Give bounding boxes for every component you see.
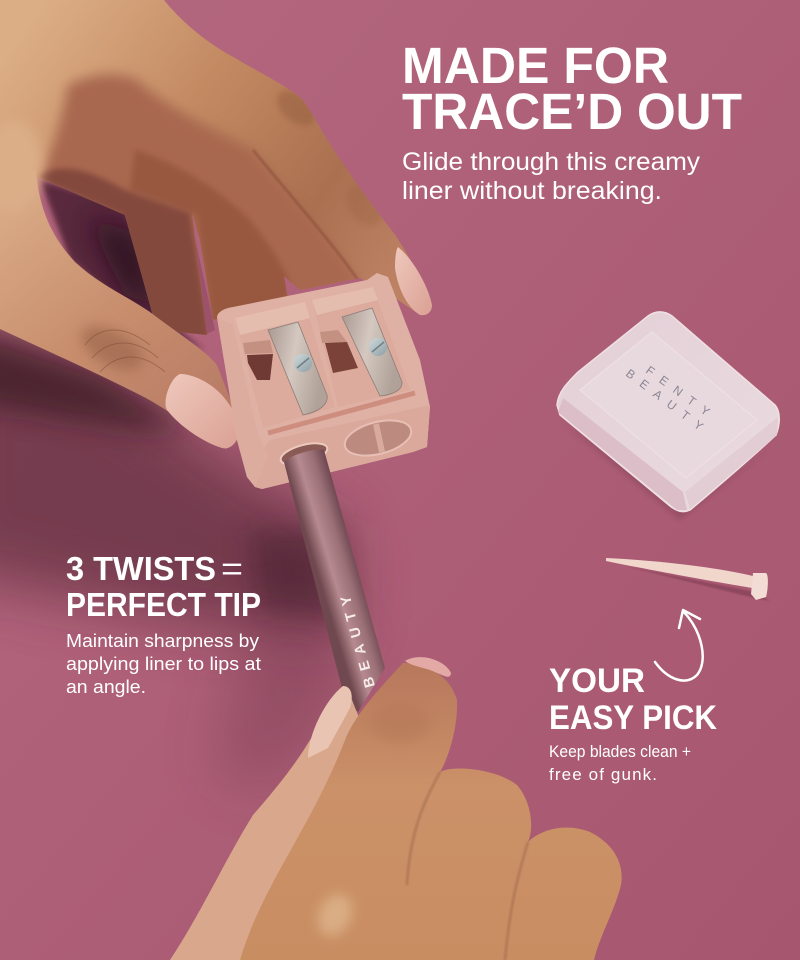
case logo: FENTY bbox=[643, 363, 720, 424]
case logo: BEAUTY bbox=[623, 366, 713, 439]
shaving hole bbox=[341, 414, 415, 462]
heading: made for trace'd out bbox=[402, 37, 742, 140]
heading: your easy pick: EASY PICK bbox=[549, 699, 717, 737]
clear case bbox=[557, 312, 779, 520]
heading: 3 twists: = bbox=[221, 550, 243, 587]
heading: your easy pick bbox=[549, 662, 717, 737]
folded fingers shading bbox=[35, 75, 391, 340]
left blade bbox=[268, 322, 327, 415]
sharpener body bbox=[217, 273, 430, 489]
groove bbox=[268, 393, 415, 433]
knuckle highlight bbox=[311, 888, 359, 942]
text: maintain sharpness: applying liner to lips at bbox=[66, 654, 261, 674]
cast shadows on background bbox=[0, 180, 345, 790]
text: maintain sharpness bbox=[66, 631, 261, 697]
text: maintain sharpness: an angle. bbox=[66, 677, 146, 697]
heading: made for trace'd out: TRACE’D OUT bbox=[402, 83, 742, 140]
subheading text bbox=[402, 148, 701, 205]
thumb whorl shading bbox=[370, 702, 430, 742]
pencil hole bbox=[278, 439, 330, 469]
right chamber bbox=[312, 287, 410, 407]
left screw bbox=[294, 354, 312, 372]
case lower-left edge bbox=[558, 398, 687, 510]
subheading text: liner without breaking. bbox=[402, 177, 662, 205]
right screw bbox=[369, 338, 387, 356]
pencil with BEAUTY lettering bbox=[284, 450, 385, 712]
right blade bbox=[342, 308, 402, 396]
text: keep blades clean: Keep blades clean + bbox=[549, 742, 691, 761]
text: keep blades clean: free of gunk. bbox=[549, 765, 657, 784]
bottom hand pinching pencil bbox=[170, 657, 622, 960]
thumb knuckle texture bbox=[74, 317, 165, 379]
index fingernail bbox=[395, 247, 432, 315]
heading: 3 twists: 3 TWISTS bbox=[66, 550, 216, 587]
heading: your easy pick: YOUR bbox=[549, 662, 645, 700]
thumbnail top bbox=[405, 657, 451, 677]
thumbnail bbox=[165, 374, 240, 448]
heading: 3 twists: PERFECT TIP bbox=[66, 586, 261, 623]
twin-blade sharpener bbox=[217, 273, 430, 489]
case inner panel bbox=[580, 332, 757, 478]
subheading text: Glide through this creamy bbox=[402, 148, 701, 176]
top hand holding sharpener bbox=[0, 0, 432, 449]
case lower-right edge bbox=[685, 417, 778, 509]
case body bbox=[557, 312, 779, 512]
arrow: from text to pick bbox=[655, 610, 703, 681]
finger separations bbox=[407, 772, 528, 960]
thumb and knuckles bbox=[240, 663, 622, 960]
thumb bbox=[0, 160, 240, 449]
pencil with BEAUTY lettering: BEAUTY bbox=[336, 587, 379, 689]
left fingernail bbox=[308, 686, 352, 758]
text: maintain sharpness: Maintain sharpness by bbox=[66, 631, 259, 651]
heading: made for trace'd out: MADE FOR bbox=[402, 37, 669, 94]
case shadow bbox=[560, 420, 775, 520]
pick tool bbox=[606, 558, 770, 601]
seam blend between thumb and hand bbox=[0, 120, 42, 210]
left finger bbox=[170, 690, 360, 960]
heading: 3 twists bbox=[66, 550, 261, 623]
left chamber bbox=[235, 302, 335, 428]
text: keep blades clean bbox=[549, 742, 691, 784]
index finger and back of hand bbox=[0, 0, 430, 335]
front face bbox=[247, 405, 430, 489]
